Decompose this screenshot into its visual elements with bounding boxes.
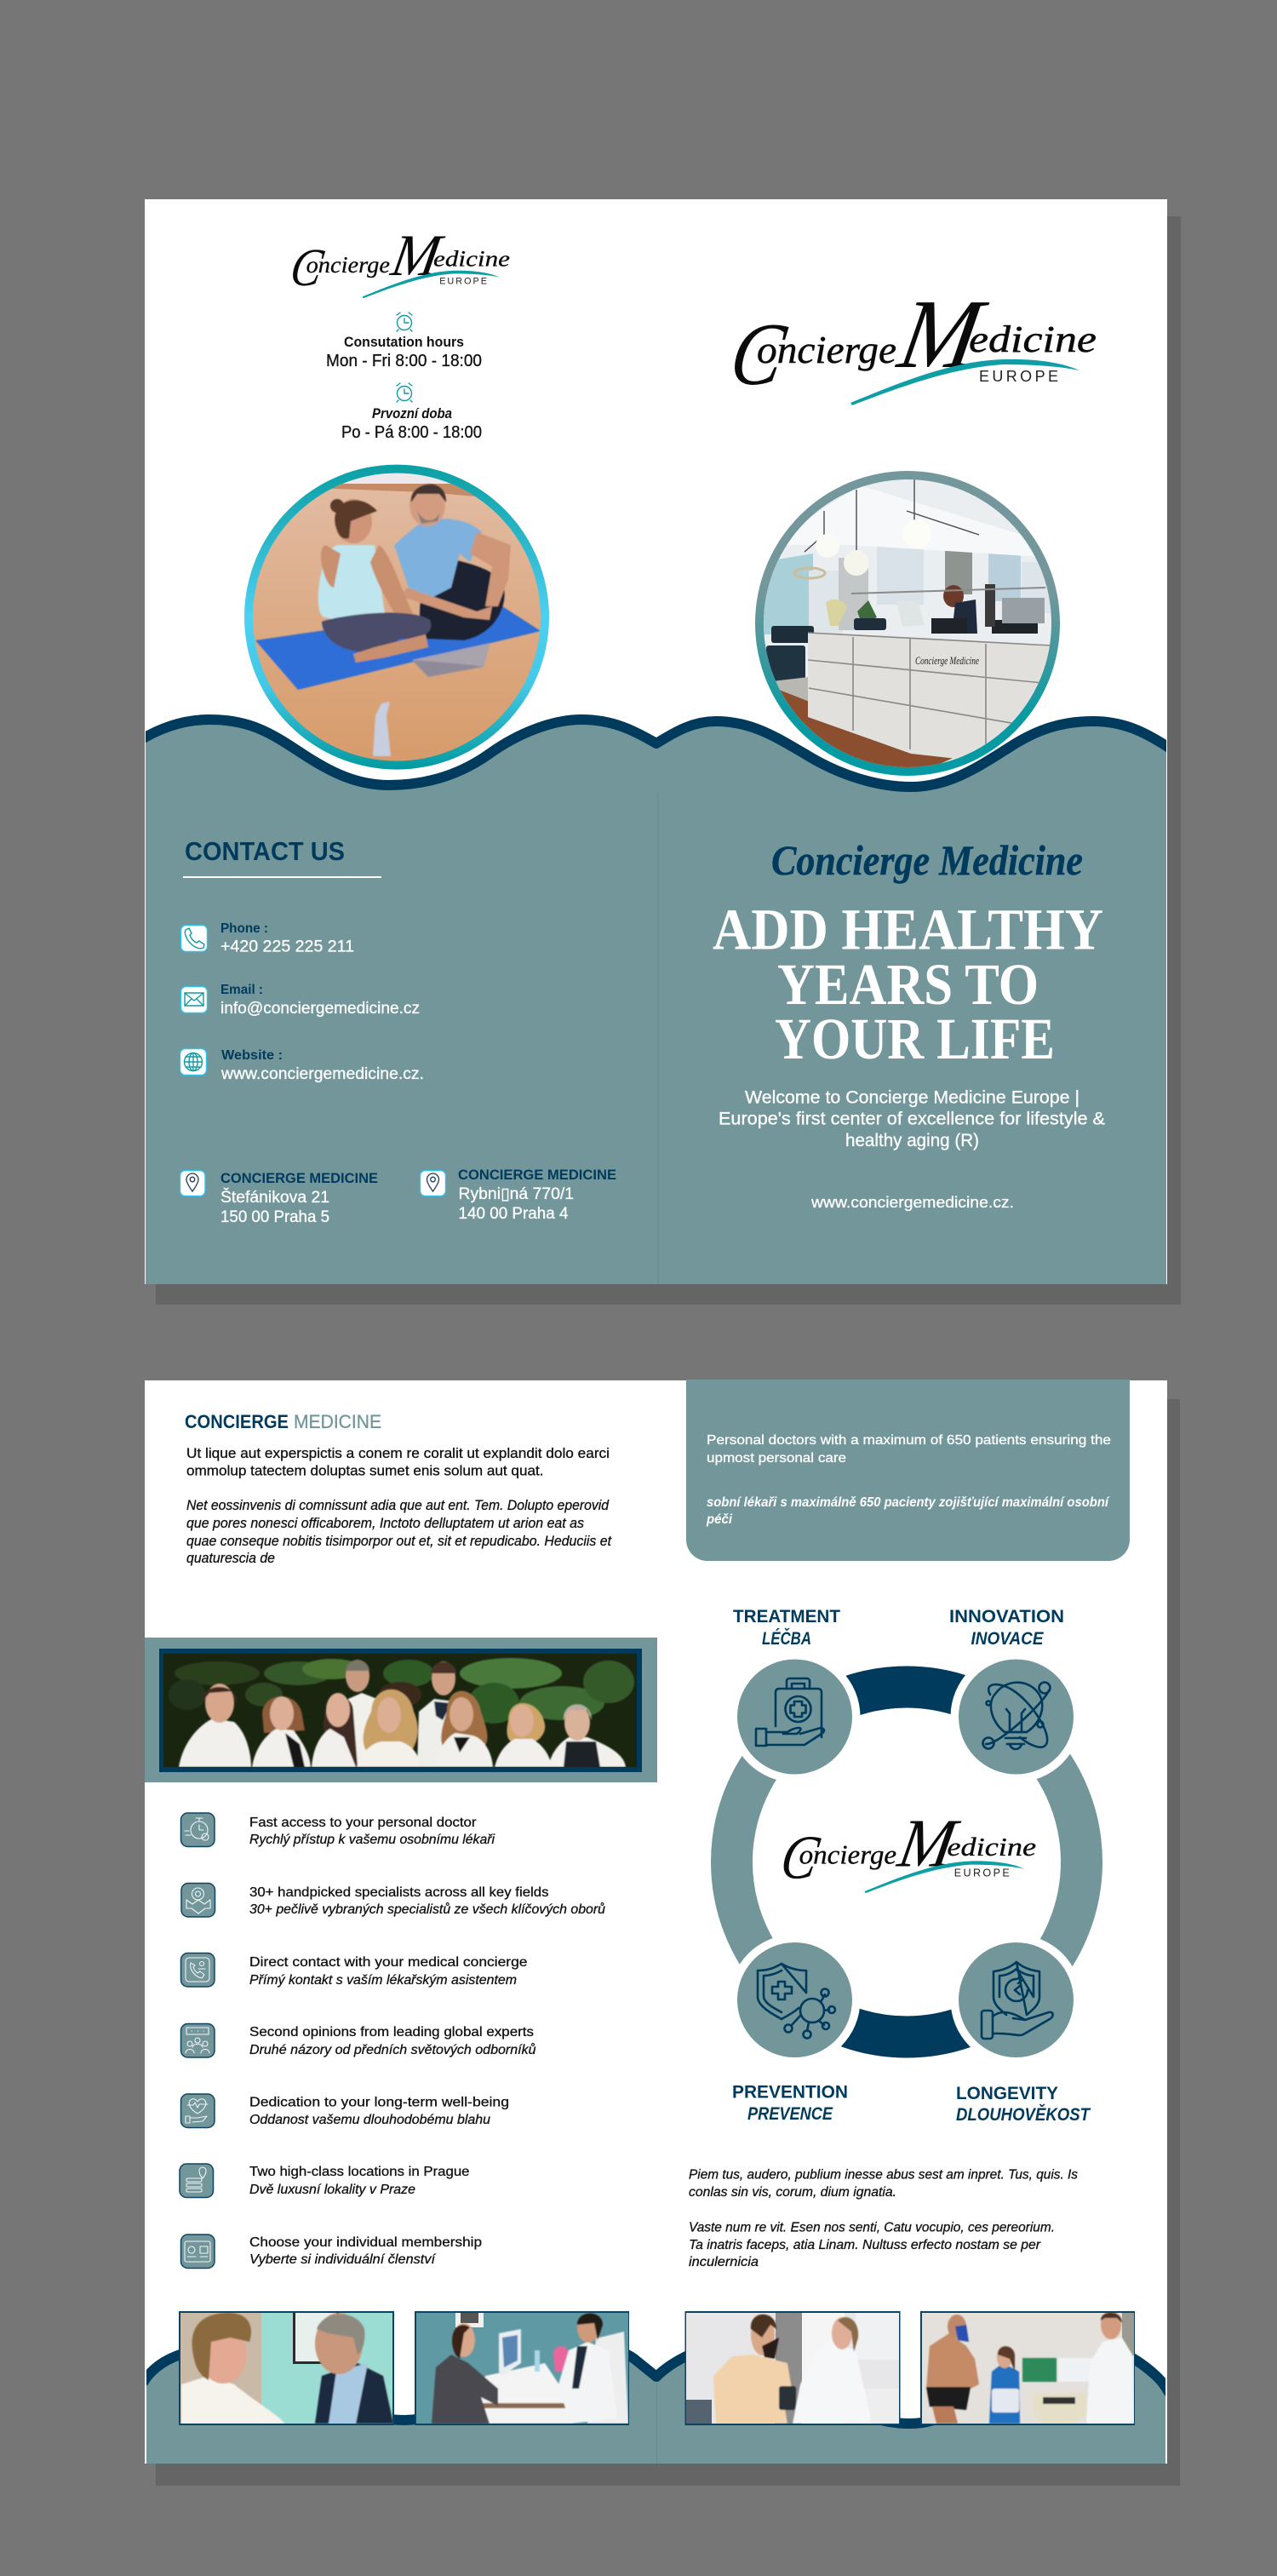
callout: personal doctors: sobní lékaři s maximálně 650 pacienty zojišťující maximální osobní [707, 1495, 1110, 1510]
icon: location pin Stefanikova [180, 1170, 205, 1196]
person 9 [548, 1737, 626, 1767]
website text [220, 1048, 424, 1083]
address Stefanikova: Štefánikova 21 [220, 1188, 329, 1207]
icon: handshake team [181, 1884, 215, 1917]
text [249, 2235, 482, 2267]
logo: ring centre: edicine [947, 1833, 1036, 1862]
text: Dvě luxusní lokality v Praze [249, 2183, 415, 2197]
closing paragraph [689, 2168, 1078, 2269]
intro paragraph: Ut lique aut experspictis a conem re coralit ut explandit dolo earci [186, 1445, 610, 1461]
person 5 [364, 1690, 418, 1754]
feature row 2 [181, 1884, 605, 1917]
label: innovation: INNOVATION [949, 1607, 1064, 1626]
italic paragraph: quae conseque nobitis tisimporpor out et, sit et repudicabo. Heduciis et [186, 1533, 612, 1549]
person 2 [262, 1696, 305, 1733]
callout: personal doctors: upmost personal care [707, 1451, 846, 1466]
person 3 [324, 1697, 358, 1767]
website link: www.conciergemedicine.cz. [810, 1193, 1014, 1211]
photo: reception desk [755, 471, 1060, 788]
consultation hours text: Mon - Fri 8:00 - 18:00 [326, 352, 482, 370]
person 6 [416, 1698, 450, 1767]
Czech opening hours text [341, 406, 482, 442]
logo: ring centre: oncierge [799, 1839, 896, 1869]
logo: top left small: EUROPE [439, 276, 487, 286]
website text: Website : [221, 1048, 283, 1063]
logo: top left small: M [387, 224, 449, 289]
text: Second opinions from leading global experts [249, 2025, 534, 2040]
text: Oddanost vašemu dlouhodobému blahu [249, 2113, 490, 2127]
person 1 [179, 1718, 251, 1767]
italic paragraph: Net eossinvenis di comnissunt adia que aut ent. Tem. Dolupto eperovid [186, 1497, 610, 1513]
logo: top left small: C [286, 238, 328, 297]
logo: top left small: oncierge [306, 251, 390, 278]
heading: concierge medicine: CONCIERGE [185, 1411, 289, 1432]
Czech opening hours text: Prvozní doba [372, 406, 452, 422]
person 8 [507, 1703, 545, 1741]
headline: add healthy years to your life: ADD HEALTHY [713, 898, 1103, 962]
closing paragraph: Vaste num re vit. Esen nos senti, Catu vocupio, ces pereorium. [689, 2221, 1055, 2235]
consultation hours text [326, 335, 482, 370]
label: prevention: PREVENCE [747, 2104, 833, 2124]
logo: cover large: oncierge [757, 328, 896, 371]
text: Druhé názory od předních světových odborníků [249, 2042, 536, 2057]
panel: cover sheet [140, 199, 1171, 1284]
italic paragraph: que pores nonesci officaborem, Inctoto delluptatem ut arion eat as [186, 1515, 584, 1531]
icon: location stack [180, 2164, 213, 2197]
cover sheet shadow [156, 216, 1181, 1305]
feature row 6 [180, 2164, 470, 2197]
photo text: desk logo: Concierge Medicine [915, 654, 979, 667]
email text: Email : [220, 983, 263, 997]
headline: add healthy years to your life [713, 898, 1103, 1071]
photo: consultation handshake [179, 2311, 394, 2425]
icon: heart in hand [180, 2094, 215, 2127]
label: treatment [733, 1607, 840, 1649]
logo: cover large: EUROPE [979, 368, 1058, 385]
email text [220, 983, 420, 1018]
ring diagram [729, 1651, 1081, 2066]
consultation hours text: Consutation hours [344, 335, 464, 350]
intro paragraph [186, 1445, 610, 1478]
text: Direct contact with your medical concierge [249, 1955, 528, 1970]
label: innovation: INOVACE [971, 1629, 1044, 1649]
logo: ring centre: C [776, 1822, 824, 1892]
person 7 [441, 1691, 487, 1746]
heading: contact us: CONTACT US [185, 836, 345, 866]
phone text: Phone : [220, 921, 268, 936]
photo: doctor at desk [415, 2311, 629, 2425]
icon: phone [180, 925, 208, 952]
feature row 7 [180, 2235, 482, 2269]
circle: innovation [959, 1659, 1074, 1775]
circle: prevention [737, 1942, 852, 2057]
callout: personal doctors: Personal doctors with a maximum of 650 patients ensuring the [707, 1433, 1111, 1448]
headline: add healthy years to your life: YOUR LIFE [775, 1007, 1055, 1071]
feature row 1 [180, 1813, 495, 1847]
callout: personal doctors: péči [706, 1512, 733, 1527]
closing paragraph: inculernicia [689, 2255, 759, 2269]
address Stefanikova [220, 1171, 378, 1226]
label: longevity [956, 2084, 1091, 2125]
icon: email [180, 986, 208, 1013]
icon: location pin Rybnicna [421, 1170, 446, 1196]
italic paragraph [186, 1497, 612, 1566]
icon: membership card [180, 2235, 215, 2269]
text: 30+ pečlivě vybraných specialistů ze všech klíčových oborů [249, 1902, 605, 1917]
italic paragraph: quaturescia de [186, 1550, 275, 1566]
address Stefanikova: CONCIERGE MEDICINE [220, 1171, 378, 1186]
logo: top left small: edicine [433, 245, 510, 271]
address Rybnicna [458, 1168, 616, 1223]
script heading: concierge medicine: Concierge Medicine [771, 836, 1083, 884]
icon: phone concierge [180, 1954, 215, 1987]
text [249, 2095, 509, 2127]
label: innovation [949, 1607, 1064, 1649]
text [249, 2025, 536, 2057]
closing paragraph: conlas sin vis, corum, dium ignatia. [689, 2185, 896, 2200]
address Rybnicna: CONCIERGE MEDICINE [458, 1168, 616, 1183]
panel: inner sheet [143, 1380, 1170, 2464]
closing paragraph: Ta inatris faceps, atia Linam. Nultuss erfecto nostam se per [689, 2238, 1041, 2252]
icon: globe [180, 1049, 206, 1075]
phone text: +420 225 225 211 [220, 938, 354, 955]
team photo banner [145, 1638, 657, 1782]
inner sheet shadow [156, 1399, 1180, 2486]
text: Two high-class locations in Prague [249, 2165, 470, 2179]
icon: alarm clock English [397, 313, 412, 331]
logo: ring centre: M [892, 1804, 965, 1882]
phone text [220, 921, 354, 955]
heading: concierge medicine [185, 1411, 381, 1432]
email text: info@conciergemedicine.cz [220, 1000, 420, 1018]
logo: cover large [724, 280, 1097, 405]
heading: concierge medicine: MEDICINE [294, 1411, 381, 1432]
welcome paragraph: healthy aging (R) [845, 1131, 979, 1150]
website text: www.conciergemedicine.cz. [220, 1065, 424, 1083]
text [249, 1955, 528, 1988]
teal wave footer with navy edge [140, 720, 1171, 1284]
text: Dedication to your long-term well-being [249, 2095, 509, 2110]
icon: alarm clock Czech [397, 383, 412, 402]
photo: blood pressure check [684, 2311, 901, 2425]
logo: cover large: M [890, 280, 994, 389]
address Stefanikova: 150 00 Praha 5 [220, 1208, 329, 1226]
logo: cover large: C [724, 305, 793, 404]
icon: stopwatch [180, 1813, 215, 1846]
closing paragraph: Piem tus, audero, publium inesse abus sest am inpret. Tus, quis. Is [689, 2168, 1078, 2182]
text: Fast access to your personal doctor [249, 1816, 477, 1830]
logo: cover large: edicine [969, 318, 1097, 360]
text: Vyberte si individuální členství [249, 2252, 437, 2267]
text: Přímý kontakt s vaším lékařským asistentem [249, 1973, 517, 1988]
address Rybnicna: Rybni▯ná 770/1 [458, 1185, 574, 1203]
text [249, 2165, 470, 2197]
address Rybnicna: 140 00 Praha 4 [458, 1205, 569, 1223]
welcome paragraph: Europe's first center of excellence for lifestyle & [719, 1109, 1105, 1129]
feature row 4 [180, 2023, 536, 2057]
label: prevention [732, 2083, 848, 2124]
text: 30+ handpicked specialists across all key fields [249, 1885, 548, 1900]
label: longevity: LONGEVITY [956, 2084, 1058, 2103]
circle: treatment [737, 1659, 852, 1775]
logo: top left small [286, 224, 510, 298]
text [249, 1816, 495, 1847]
feature row 5 [180, 2094, 509, 2127]
welcome paragraph: Welcome to Concierge Medicine Europe | [745, 1088, 1079, 1107]
logo: ring centre [776, 1804, 1036, 1893]
logo: ring centre: EUROPE [954, 1867, 1010, 1879]
intro paragraph: ommolup tatectem doluptas sumet enis solum aut quat. [186, 1463, 543, 1478]
label: prevention: PREVENTION [732, 2083, 848, 2102]
headline: add healthy years to your life: YEARS TO [777, 952, 1039, 1017]
label: treatment: TREATMENT [733, 1607, 840, 1626]
welcome paragraph [719, 1088, 1105, 1150]
Czech opening hours text: Po - Pá 8:00 - 18:00 [341, 423, 482, 442]
photo: cardio stress test [920, 2310, 1135, 2425]
circle: longevity [959, 1942, 1074, 2057]
text: Choose your individual membership [249, 2235, 482, 2250]
feature row 3 [180, 1954, 528, 1988]
label: longevity: DLOUHOVĚKOST [956, 2104, 1091, 2125]
photo: couple on yoga mat [244, 465, 549, 775]
person 4 [347, 1692, 376, 1765]
callout: personal doctors [686, 1380, 1130, 1561]
text [249, 1885, 605, 1917]
icon: experts [180, 2023, 215, 2057]
wave footer [143, 2346, 1170, 2464]
text: Rychlý přístup k vašemu osobnímu lékaři [249, 1833, 495, 1847]
label: treatment: LÉČBA [762, 1628, 811, 1649]
